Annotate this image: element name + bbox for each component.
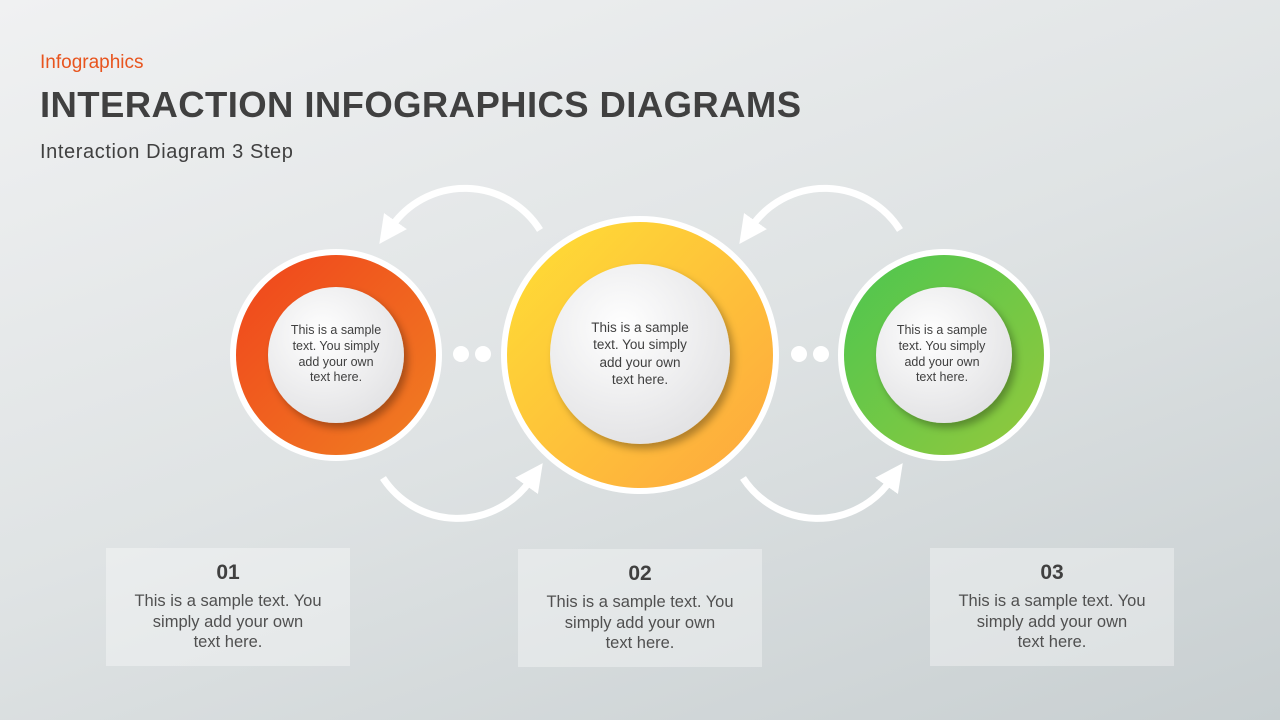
circle 3 green: text. You simply <box>899 339 986 353</box>
step box 02 <box>518 549 762 667</box>
step box 01: text here. <box>194 633 262 651</box>
circle 3 green: This is a sample <box>897 323 987 337</box>
circle 2 yellow: add your own <box>599 355 681 370</box>
step box 01: simply add your own <box>153 612 303 630</box>
step box 02: simply add your own <box>565 614 715 632</box>
subtitle: Interaction Diagram 3 Step <box>40 141 294 163</box>
circle 2 yellow: text here. <box>612 372 668 387</box>
step box 03: 03 <box>1040 561 1064 584</box>
circle 2 yellow: text. You simply <box>593 337 687 352</box>
circle 3 green: text here. <box>916 370 968 384</box>
step box 02: text here. <box>606 634 674 652</box>
eyebrow label: Infographics <box>40 52 144 73</box>
circle 1 orange <box>230 249 442 461</box>
circle 1 orange: text here. <box>310 370 362 384</box>
arrow: bottom right <box>743 478 890 518</box>
step box 03 <box>930 548 1174 666</box>
dots right <box>791 346 829 362</box>
circle 2 yellow <box>501 216 779 494</box>
step box 01 <box>106 548 350 666</box>
step box 02: 02 <box>628 562 652 585</box>
circle 1 orange: add your own <box>298 355 374 369</box>
dots left <box>453 346 491 362</box>
circle 1 orange: This is a sample <box>291 323 381 337</box>
step box 01: This is a sample text. You <box>134 592 322 610</box>
step box 03: This is a sample text. You <box>958 592 1146 610</box>
step box 02: This is a sample text. You <box>546 593 734 611</box>
step box 01: 01 <box>216 561 240 584</box>
circle 3 green: add your own <box>904 355 980 369</box>
circle 3 green <box>838 249 1050 461</box>
arrow: top right <box>752 188 900 230</box>
circle 2 yellow: This is a sample <box>591 320 689 335</box>
step box 03: simply add your own <box>977 612 1127 630</box>
title: INTERACTION INFOGRAPHICS DIAGRAMS <box>40 84 801 125</box>
step box 03: text here. <box>1018 633 1086 651</box>
arrow: bottom left <box>383 478 530 518</box>
arrow: top left <box>392 188 540 230</box>
circle 1 orange: text. You simply <box>293 339 380 353</box>
